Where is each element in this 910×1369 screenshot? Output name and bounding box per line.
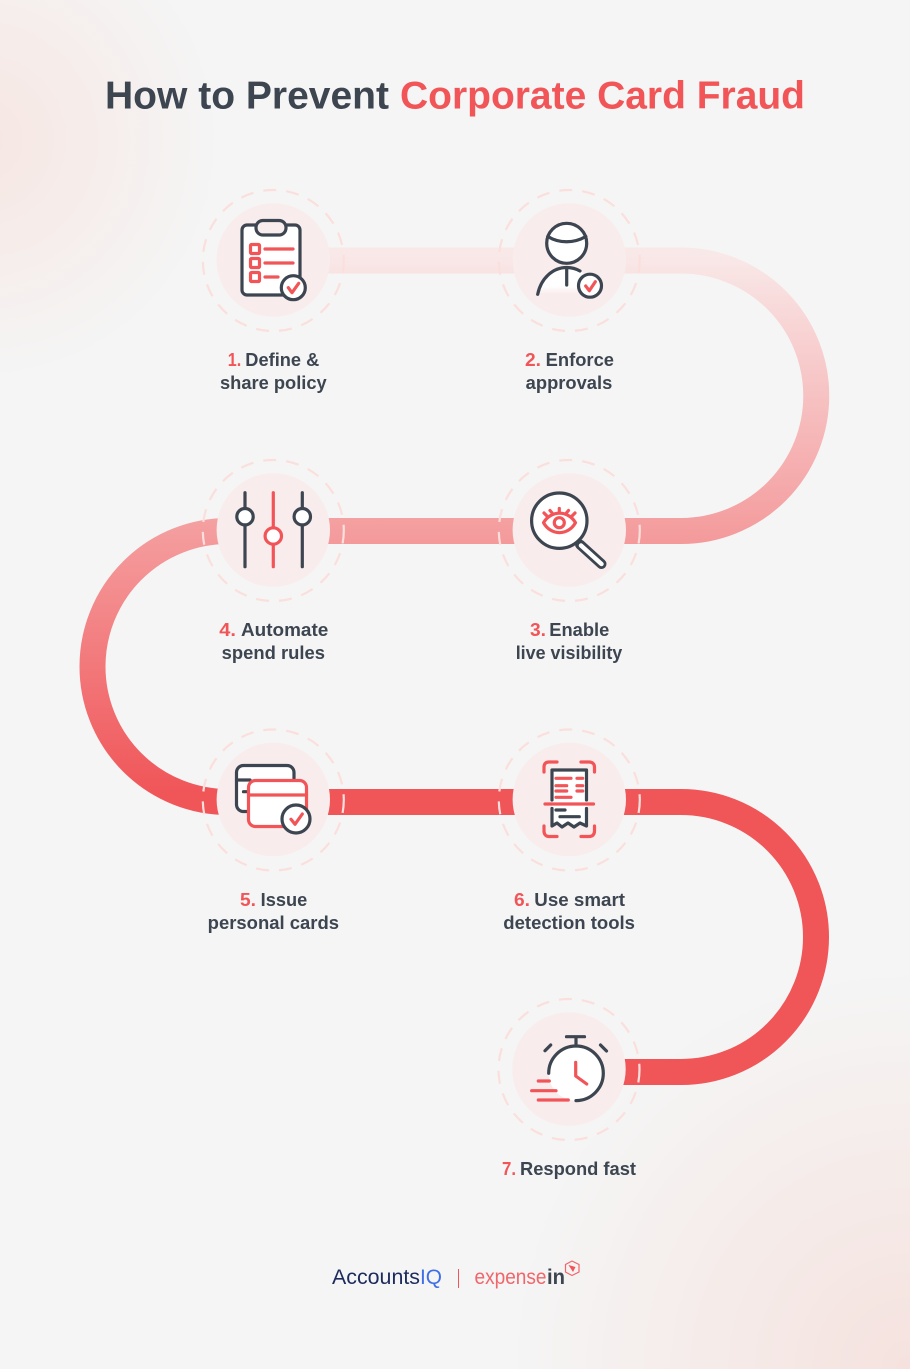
label: step 5: 5. [240, 890, 256, 910]
label: step 3 [516, 620, 622, 663]
label: step 3: Enable [549, 620, 609, 640]
logo: AccountsIQ: IQ [420, 1266, 442, 1289]
label: step 6: detection tools [503, 913, 635, 933]
title: Corporate Card Fraud [400, 74, 805, 118]
label: step 2: 2. [525, 350, 541, 370]
icon: stopwatch [532, 1037, 606, 1101]
logo: expensein: in [547, 1266, 565, 1289]
step 3: enable live visibility [499, 460, 640, 663]
step 1: define and share policy [203, 190, 344, 393]
label: step 3: live visibility [516, 643, 622, 663]
icon: magnifier with eye [532, 493, 602, 564]
label: step 5: personal cards [208, 913, 339, 933]
icon: sliders [237, 493, 310, 567]
label: step 2 [525, 350, 614, 393]
title [105, 74, 805, 118]
label: step 6 [503, 890, 635, 933]
label: step 1 [220, 350, 327, 393]
logos [332, 1261, 579, 1289]
label: step 1: share policy [220, 373, 327, 393]
label: step 4: Automate [241, 620, 328, 640]
label: step 1: Define & [245, 350, 319, 370]
label: step 2: approvals [526, 373, 612, 393]
label: step 4: 4. [219, 620, 236, 640]
label: step 7: Respond fast [520, 1159, 636, 1179]
label: step 6: Use smart [534, 890, 625, 910]
label: step 4: spend rules [222, 643, 325, 663]
label: step 3: 3. [530, 620, 546, 640]
step 5: issue personal cards [203, 730, 344, 933]
icon: person with check [538, 223, 602, 297]
icon: overlapping cards with check [236, 766, 310, 833]
step 7: respond fast [498, 999, 640, 1179]
step 6: use smart detection tools [499, 730, 640, 933]
step 4: automate spend rules [203, 460, 344, 663]
label: step 2: Enforce [546, 350, 614, 370]
label: step 5: Issue [261, 890, 307, 910]
icon: clipboard checklist [242, 220, 305, 300]
icon: receipt scanner [544, 762, 594, 836]
logo: expensein: expense [474, 1266, 546, 1289]
label: step 4 [219, 620, 328, 663]
logo: expensein [474, 1261, 579, 1289]
label: step 5 [208, 890, 339, 933]
step 2: enforce approvals [499, 190, 640, 393]
winding path connecting the steps [93, 260, 816, 1072]
title: How to Prevent [105, 74, 389, 118]
label: step 1: 1. [228, 350, 241, 370]
label: step 6: 6. [514, 890, 530, 910]
label: step 7: 7. [502, 1159, 516, 1179]
logo: AccountsIQ: Accounts [332, 1266, 420, 1289]
